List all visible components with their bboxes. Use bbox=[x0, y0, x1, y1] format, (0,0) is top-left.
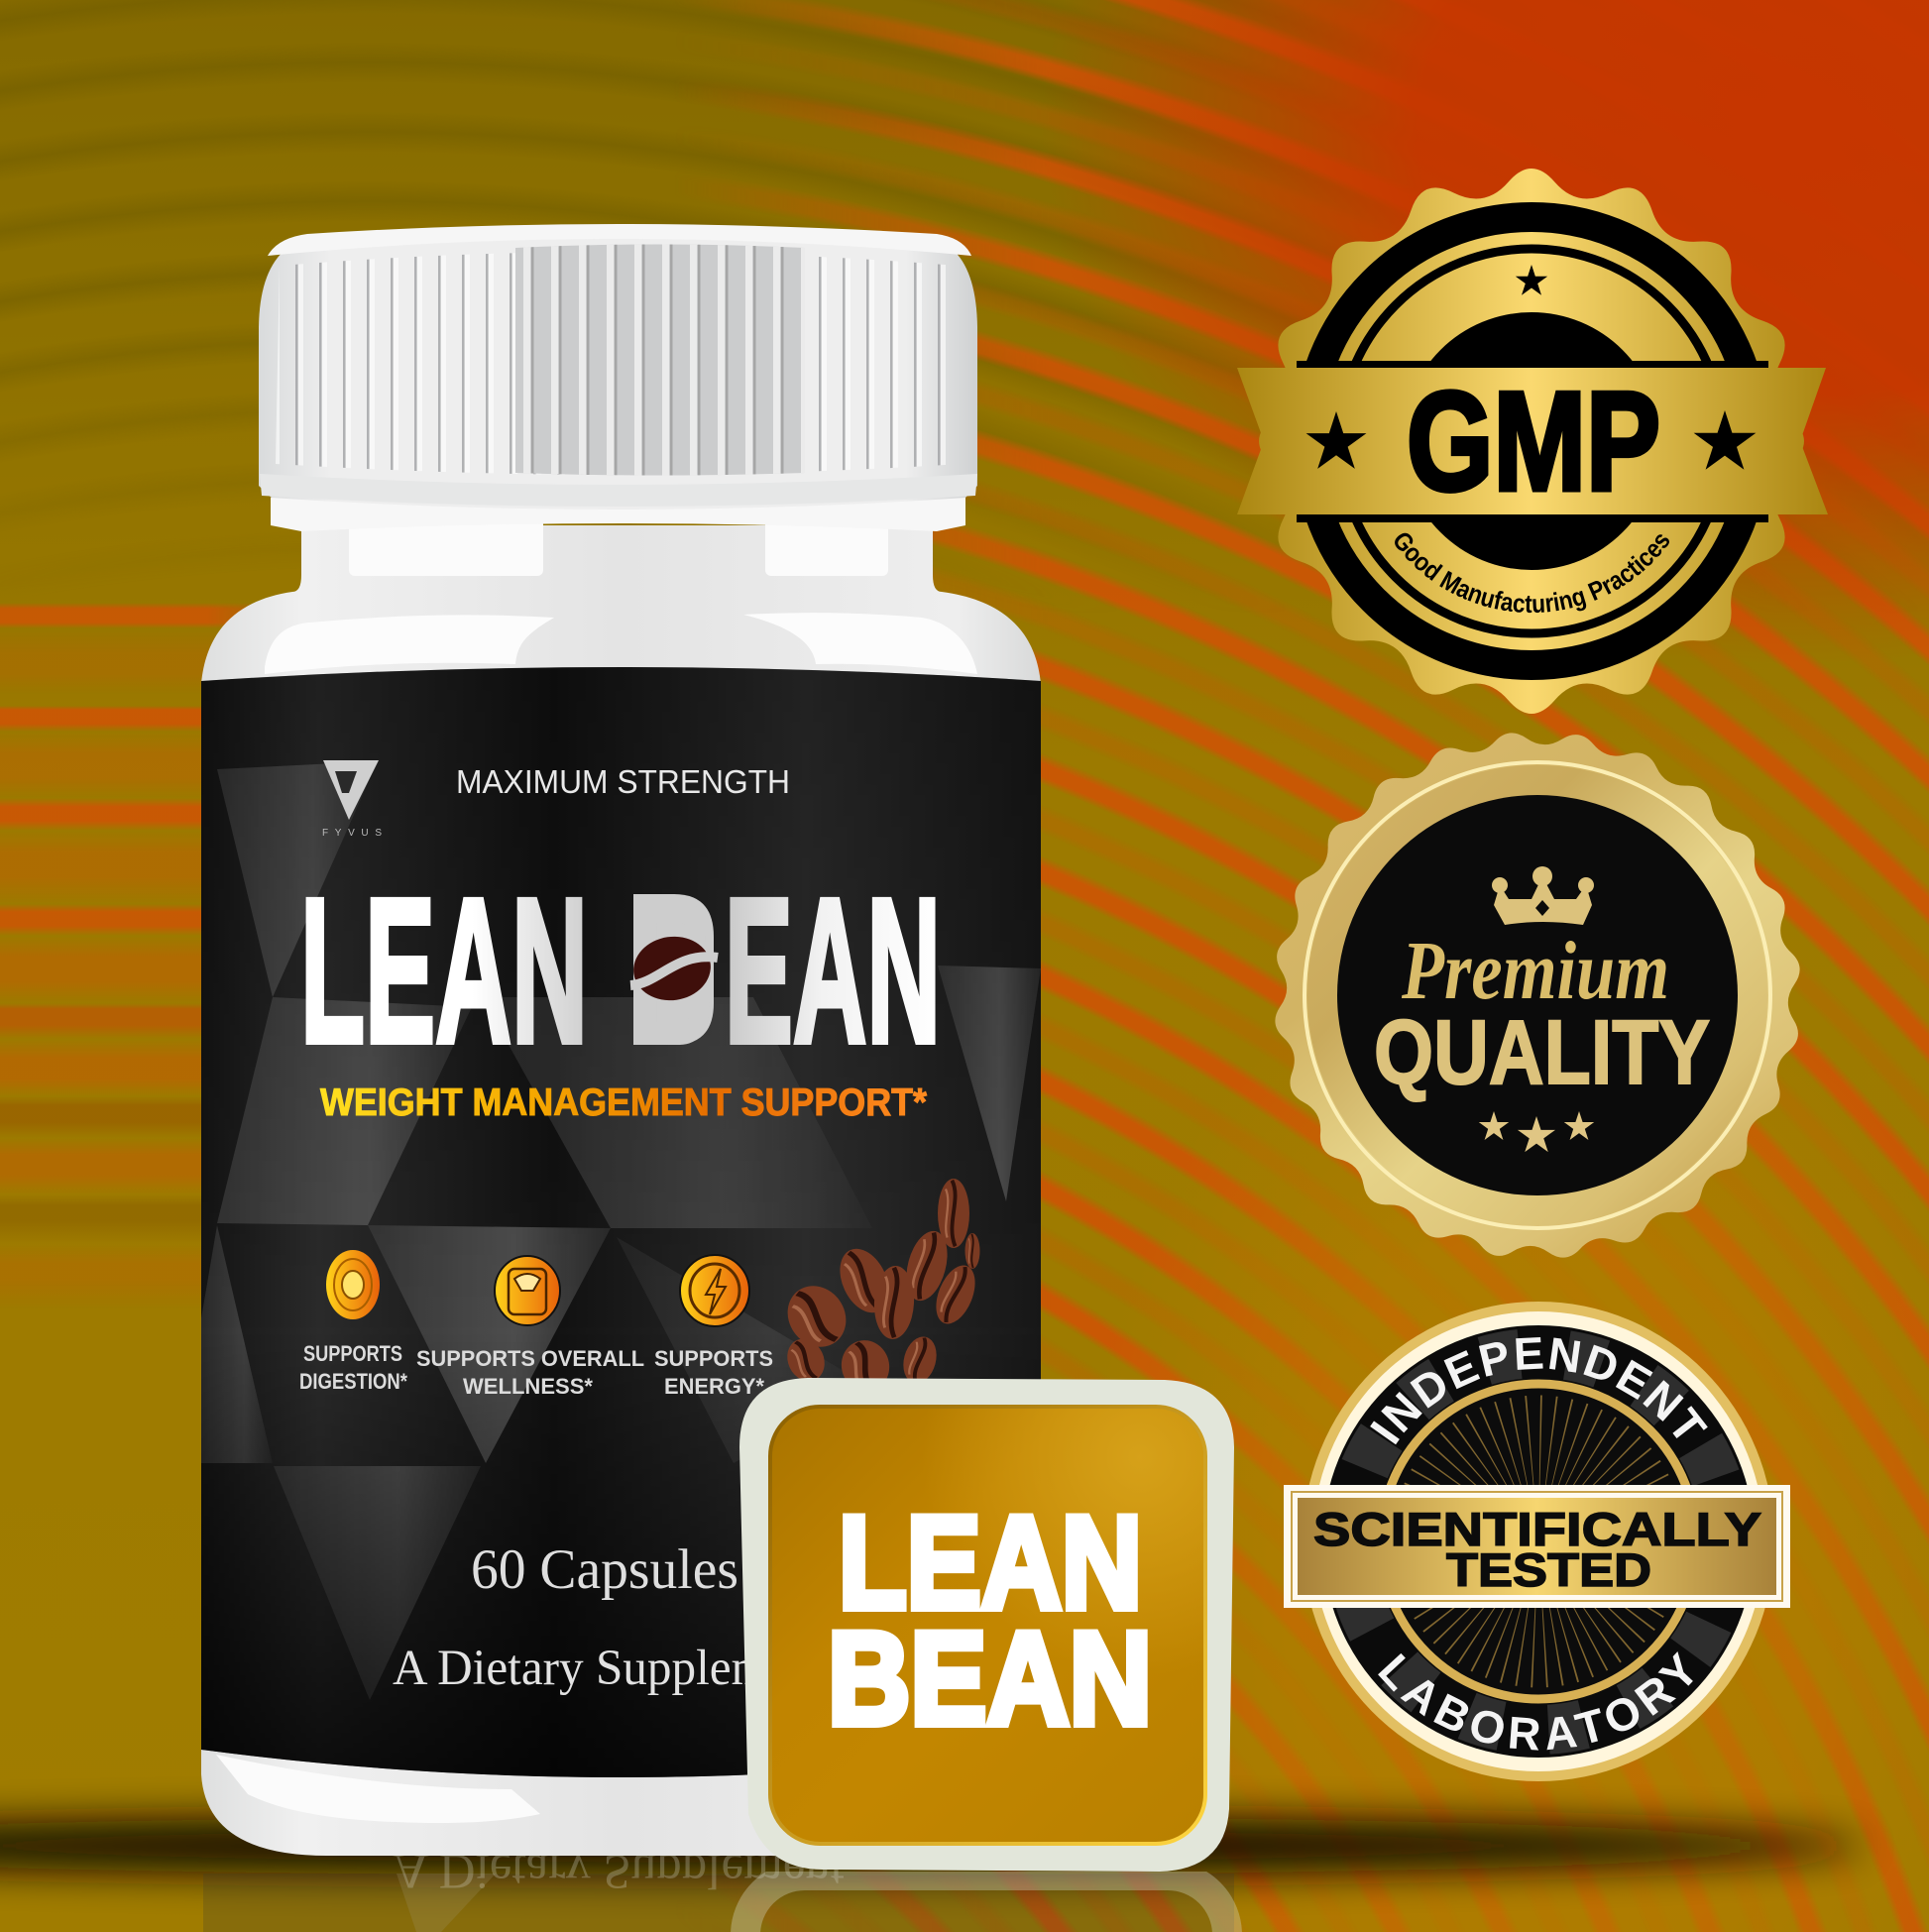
neck highlight left bbox=[349, 518, 543, 576]
GMP text: GMP bbox=[1407, 363, 1660, 520]
icon: scale bbox=[495, 1256, 560, 1325]
benefit: wellness bbox=[416, 1346, 644, 1399]
tamper ring bbox=[271, 498, 965, 531]
seal white rim bbox=[1312, 1311, 1764, 1771]
benefit: energy bbox=[654, 1346, 773, 1399]
icon: crown bbox=[1492, 866, 1594, 925]
cap centre ribs bbox=[515, 244, 805, 476]
B with coffee bean: B bbox=[633, 853, 715, 1090]
benefit: digestion: SUPPORTS bbox=[303, 1341, 402, 1366]
maximum strength: MAXIMUM STRENGTH bbox=[456, 763, 790, 800]
banner text 1: SCIENTIFICALLY bbox=[1313, 1503, 1761, 1555]
badge: premium quality bbox=[1236, 694, 1839, 1297]
seal gold inner ring bbox=[1381, 1384, 1696, 1699]
shoulder highlight right bbox=[743, 613, 977, 674]
label: EAN bbox=[725, 856, 941, 1086]
cap top rim bbox=[268, 224, 971, 256]
GMP rings bbox=[1307, 217, 1756, 665]
cap lower band bbox=[260, 474, 977, 507]
seal black ring bbox=[1322, 1325, 1755, 1758]
dietary supplement text: A Dietary Supplement bbox=[393, 1641, 829, 1696]
banner text 2: TESTED bbox=[1446, 1543, 1651, 1596]
benefit: digestion bbox=[299, 1341, 407, 1394]
GMP centre bbox=[1403, 312, 1660, 570]
cap bbox=[259, 227, 977, 513]
premium stars bbox=[1479, 1111, 1594, 1152]
premium scalloped edge bbox=[1236, 694, 1839, 1297]
GMP scalloped edge bbox=[1259, 169, 1804, 714]
bottle reflection bbox=[203, 1874, 1234, 1932]
banner frame bbox=[1284, 1485, 1790, 1608]
bottle bbox=[201, 224, 1041, 1856]
brand logo bbox=[322, 760, 382, 839]
premium black disc bbox=[1337, 795, 1738, 1195]
badge: scientifically tested bbox=[1284, 1302, 1790, 1781]
benefit: wellness: SUPPORTS OVERALL bbox=[416, 1346, 644, 1371]
cap ribs bbox=[276, 252, 962, 475]
seal gold rim bbox=[1303, 1302, 1774, 1781]
shoulder highlight left bbox=[265, 615, 554, 674]
B with coffee bean bbox=[629, 853, 718, 1090]
label bbox=[201, 667, 1041, 1777]
badge: GMP bbox=[1237, 169, 1828, 714]
GMP top star bbox=[1516, 265, 1547, 295]
sticker gold face bbox=[770, 1407, 1205, 1844]
cap centre band bbox=[515, 244, 805, 476]
sunburst bbox=[1444, 1447, 1633, 1636]
sticker: lean bean bbox=[739, 1378, 1234, 1872]
GMP left star bbox=[1306, 411, 1366, 469]
premium gold ring bbox=[1305, 762, 1770, 1228]
bottle body bbox=[201, 525, 1041, 1856]
banner border bbox=[1292, 1492, 1782, 1601]
premium inner ring bbox=[1307, 765, 1767, 1225]
sticker BEAN: BEAN bbox=[828, 1606, 1152, 1753]
neck highlight right bbox=[765, 518, 888, 576]
benefit: wellness: WELLNESS* bbox=[463, 1374, 593, 1399]
benefit: energy: ENERGY* bbox=[664, 1374, 764, 1399]
coffee beans bbox=[776, 1179, 982, 1397]
bottom highlight bbox=[216, 1755, 540, 1823]
weight management support: WEIGHT MANAGEMENT SUPPORT* bbox=[320, 1081, 928, 1124]
benefit: digestion: DIGESTION* bbox=[299, 1369, 407, 1394]
sticker gloss bbox=[772, 1409, 1203, 1842]
LEAN title: LEAN bbox=[300, 856, 588, 1086]
label shading bbox=[201, 667, 1041, 1777]
premium text: Premium bbox=[1401, 925, 1669, 1017]
laboratory text: LABORATORY bbox=[1378, 1651, 1693, 1751]
seal ring segments bbox=[1350, 1353, 1727, 1730]
label triangles bbox=[201, 761, 1041, 1700]
GMP arc text: Good Manufacturing Practices bbox=[1395, 533, 1669, 613]
sticker LEAN: LEAN bbox=[839, 1490, 1142, 1637]
GMP back band bbox=[1297, 361, 1768, 522]
floor shadow bbox=[0, 1816, 1864, 1875]
independent text: INDEPENDENT bbox=[1370, 1337, 1708, 1445]
brand logo: FYVUS bbox=[322, 828, 382, 839]
sticker frame bbox=[739, 1378, 1234, 1872]
GMP ribbon bbox=[1237, 368, 1828, 514]
banner gold fill bbox=[1298, 1498, 1776, 1595]
GMP right star bbox=[1694, 410, 1756, 470]
icon: energy bbox=[680, 1255, 749, 1326]
icon: digestion bbox=[326, 1250, 380, 1319]
capsule count: 60 Capsules bbox=[471, 1538, 738, 1601]
benefit: energy: SUPPORTS bbox=[654, 1346, 773, 1371]
label background bbox=[201, 667, 1041, 1777]
quality text: QUALITY bbox=[1374, 1002, 1710, 1103]
reflected bottle text: A Dietary Supplement bbox=[393, 1843, 845, 1898]
